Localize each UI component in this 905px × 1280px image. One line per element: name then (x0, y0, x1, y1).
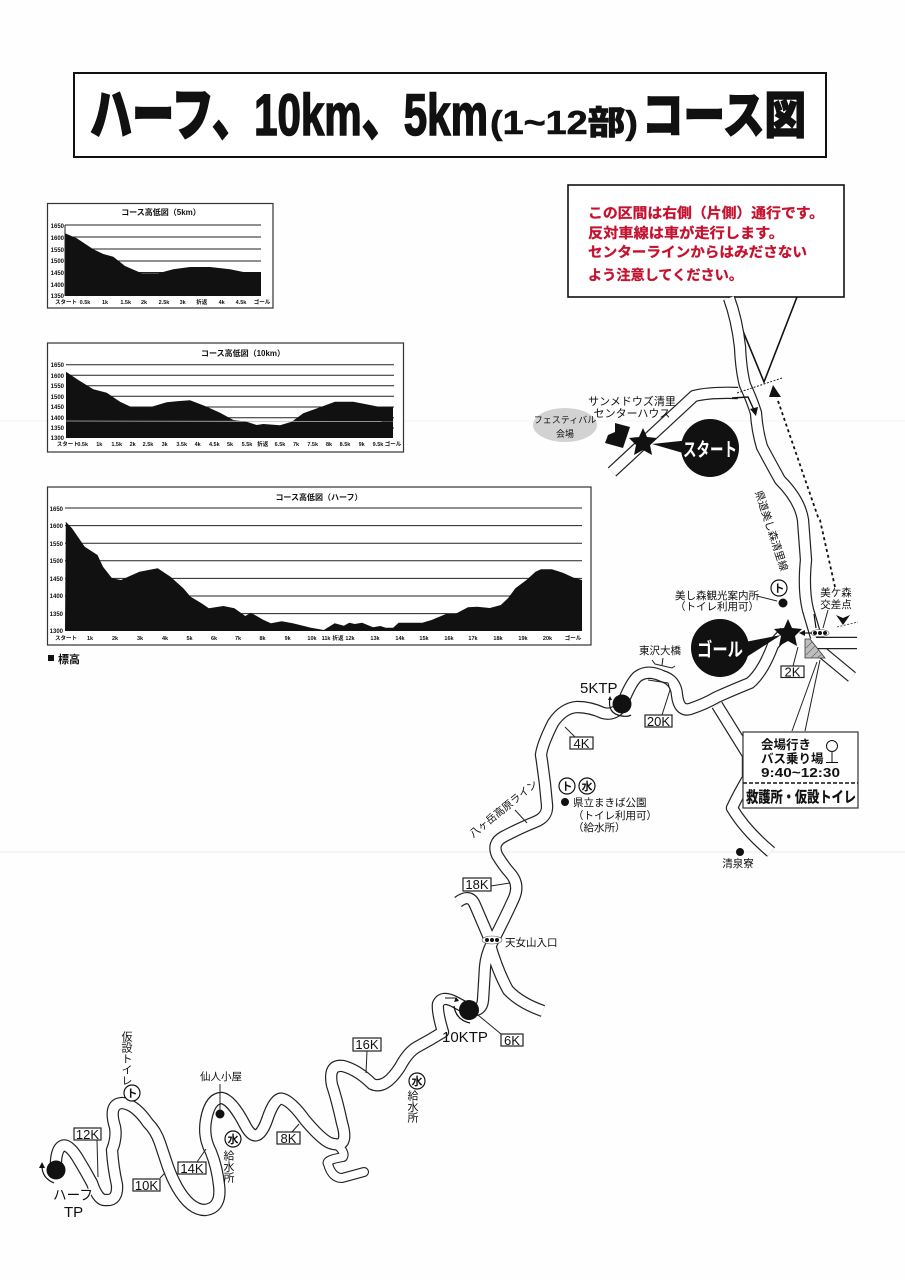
panel: elevation chart 5km: 1650 (51, 224, 65, 230)
panel: elevation chart 5km: 1400 (51, 283, 65, 289)
legend: elevation: 標高 (58, 652, 80, 666)
title: ハーフ、10km、5km (90, 83, 488, 148)
panel: elevation chart 10km: 3.5k (176, 442, 188, 448)
panel: elevation chart half: 12k (345, 636, 356, 642)
arrow: dashed one-way route (737, 378, 835, 587)
callout: one-side traffic notice: 反対車線は車が走行します。 (588, 225, 784, 241)
panel: elevation chart 10km: 5k (227, 442, 234, 448)
panel: elevation chart 5km: 1450 (51, 271, 65, 277)
label: Migamori crossing: 美ケ森 (820, 586, 852, 599)
label: festival venue: フェスティバル (534, 415, 596, 425)
panel: elevation chart 5km: 1550 (51, 248, 65, 254)
panel: elevation chart half: 1k (87, 636, 94, 642)
start marker: スタート (683, 439, 737, 461)
panel: elevation chart 10km: 7k (293, 442, 300, 448)
title: (1~12部) (490, 104, 638, 141)
callout: one-side traffic notice: この区間は右側（片側）通行です。 (588, 205, 824, 221)
10K turn point: 10KTP (442, 1029, 488, 1046)
5K turn point: 5KTP (580, 680, 618, 697)
panel: elevation chart 5km: 4.5k (236, 300, 247, 306)
panel: elevation chart 10km: 0.5k (77, 442, 89, 448)
label: 8K (277, 1124, 300, 1146)
panel: elevation chart 10km: コース高低図（10km） (201, 348, 285, 358)
panel: elevation chart half (48, 487, 591, 645)
panel: elevation chart half: 16k (444, 636, 455, 642)
panel: elevation chart 5km: コース高低図（5km） (121, 207, 201, 217)
label: 4K (565, 727, 593, 751)
label: festival venue: 会場 (556, 428, 574, 439)
panel: elevation chart 10km: 1450 (51, 405, 65, 411)
label: Higashisawa bridge (639, 644, 681, 668)
panel: bus stop and first aid: バス乗り場 (761, 751, 824, 766)
label: 2K: 2K (785, 664, 801, 680)
panel: elevation chart half: 1350 (50, 612, 64, 618)
panel: elevation chart 10km: 8.5k (340, 442, 351, 448)
panel: elevation chart half: 5k (186, 636, 193, 642)
panel: elevation chart half: ゴール (565, 634, 582, 642)
panel: elevation chart half: 1300 (50, 629, 64, 635)
panel: elevation chart half: 1600 (50, 524, 64, 530)
arrow: approach to Migamori crossing (836, 615, 850, 625)
panel: elevation chart 10km: 7.5k (307, 442, 319, 448)
panel: elevation chart 5km: 2.5k (159, 300, 170, 306)
callout: one-side traffic notice (568, 185, 844, 382)
panel: elevation chart 10km: 2.5k (143, 442, 154, 448)
panel: elevation chart 10km (48, 343, 404, 452)
panel: elevation chart 10km: 1350 (51, 426, 65, 432)
label: 14K (178, 1149, 206, 1176)
label: Seisenryo: 清泉寮 (722, 857, 754, 870)
panel: elevation chart 10km: 1500 (51, 395, 65, 401)
title: コース図 (642, 88, 806, 144)
label: 8K: 8K (281, 1131, 297, 1146)
label: Sun Meadows center house: センターハウス (594, 407, 670, 420)
5K turn point (580, 680, 632, 716)
label: tourist information: ト (774, 583, 784, 595)
label: Seisenryo (722, 848, 754, 870)
label: 10K: 10K (135, 1178, 158, 1193)
panel: elevation chart 5km: ゴール (254, 298, 271, 306)
title (74, 73, 826, 157)
course map roads (56, 298, 857, 1210)
panel: elevation chart 10km: 1600 (51, 374, 65, 380)
label: tourist information (675, 580, 788, 613)
label: tourist information: （トイレ利用可） (675, 601, 759, 613)
label: 18K (463, 877, 510, 892)
label: 18K: 18K (465, 877, 489, 892)
goal marker (691, 619, 802, 677)
water station 1: 給水所 (406, 1090, 418, 1124)
panel: elevation chart 5km: 折返 (196, 298, 208, 306)
callout: one-side traffic notice: センターラインからはみださない (588, 244, 807, 260)
panel: elevation chart half: 19k (518, 636, 529, 642)
label: Sun Meadows center house: サンメドウズ清里 (588, 394, 676, 408)
panel: elevation chart 10km: 9.5k (373, 442, 384, 448)
label: Migamori crossing: 交差点 (820, 598, 852, 611)
panel: elevation chart half: 1400 (50, 594, 64, 600)
label: 14K: 14K (180, 1161, 204, 1176)
panel: bus stop and first aid: 会場行き (761, 737, 811, 752)
label: Tennyosan entrance (482, 936, 558, 949)
water station 1: 水 (412, 1074, 422, 1088)
label: 10K (133, 1173, 165, 1193)
label: Sennin hut: 仙人小屋 (200, 1070, 242, 1083)
half turn point: TP (64, 1204, 83, 1221)
panel: elevation chart 5km: 3k (180, 300, 187, 306)
panel: elevation chart half: スタート (55, 634, 77, 642)
panel: elevation chart half: 20k (543, 636, 553, 642)
label: 20K (645, 680, 672, 729)
panel: elevation chart 10km: 6.5k (275, 442, 286, 448)
panel: elevation chart half: 1500 (50, 559, 64, 565)
panel: elevation chart 5km: 1350 (51, 294, 65, 300)
label: temporary toilet: ト (126, 1088, 138, 1100)
label: temporary toilet (120, 1031, 140, 1101)
panel: elevation chart 10km: 4k (195, 442, 202, 448)
icon: building (605, 423, 630, 448)
panel: elevation chart 5km: 1600 (51, 236, 65, 242)
label: 12K: 12K (76, 1127, 99, 1142)
panel: elevation chart 10km: 2k (130, 442, 137, 448)
panel: elevation chart half: 折返 (332, 634, 344, 642)
panel: elevation chart half: 10k (307, 636, 318, 642)
panel: elevation chart half: 18k (493, 636, 504, 642)
panel: elevation chart half: 6k (211, 636, 218, 642)
label: Sun Meadows center house (588, 394, 676, 420)
arrow: course direction at top turn (732, 397, 758, 416)
panel: elevation chart 10km: 4.5k (209, 442, 221, 448)
panel: elevation chart 10km: 1550 (51, 384, 65, 390)
start marker (629, 419, 739, 477)
label: Sennin hut (200, 1070, 242, 1118)
label: prefectural Makiba park: ト (562, 781, 572, 793)
label: 6K (478, 1015, 523, 1048)
panel: bus stop and first aid: 9:40~12:30 (761, 765, 840, 780)
panel: elevation chart half: 17k (468, 636, 479, 642)
hatched bus area (792, 639, 825, 731)
10K turn point (442, 997, 488, 1046)
label: prefectural Makiba park: （トイレ利用可） (573, 810, 657, 822)
panel: elevation chart 5km (48, 204, 273, 308)
panel: bus stop and first aid: 救護所・仮設トイレ (746, 788, 856, 806)
panel: elevation chart half: 9k (285, 636, 292, 642)
panel: elevation chart 10km: 1650 (51, 363, 65, 369)
label: 16K: 16K (355, 1037, 379, 1052)
panel: elevation chart 5km: 2k (141, 300, 148, 306)
label: 16K (353, 1037, 381, 1073)
panel: elevation chart 5km: 0.5k (80, 300, 91, 306)
panel: elevation chart 10km: スタート (57, 440, 79, 448)
panel: elevation chart 10km: 1k (96, 442, 103, 448)
half turn point (39, 1160, 93, 1221)
panel: elevation chart 10km: 1400 (51, 416, 65, 422)
label: prefectural road name: 県道美し森清里線 (752, 489, 791, 573)
label: 4K: 4K (574, 736, 590, 751)
panel: elevation chart half: 14k (395, 636, 406, 642)
panel: elevation chart half: 15k (419, 636, 430, 642)
panel: elevation chart half: 1550 (50, 542, 64, 548)
label: 6K: 6K (504, 1033, 520, 1048)
panel: elevation chart 5km: 1.5k (120, 300, 132, 306)
water station 2 (222, 1131, 241, 1184)
panel: elevation chart 10km: 8k (326, 442, 333, 448)
label: prefectural Makiba park: 水 (582, 779, 592, 793)
panel: elevation chart 10km: ゴール (385, 440, 402, 448)
panel: elevation chart half: 8k (259, 636, 266, 642)
panel: elevation chart 5km: 1500 (51, 259, 65, 265)
label: prefectural Makiba park: （給水所） (573, 821, 626, 834)
callout: one-side traffic notice: よう注意してください。 (588, 267, 743, 283)
panel: elevation chart half: コース高低図（ハーフ） (275, 492, 363, 502)
panel: bus stop and first aid (743, 732, 858, 808)
goal marker: ゴール (697, 638, 743, 661)
panel: elevation chart 5km: 4k (219, 300, 226, 306)
panel: elevation chart 10km: 3k (162, 442, 169, 448)
label: 20K: 20K (647, 714, 670, 729)
panel: elevation chart 10km: 1.5k (111, 442, 123, 448)
panel: elevation chart half: 3k (137, 636, 144, 642)
label: Yatsugatake Kogen Line: 八ヶ岳高原ライン (467, 777, 540, 840)
legend: elevation (48, 652, 80, 666)
panel: elevation chart half: 2k (112, 636, 119, 642)
panel: elevation chart half: 7k (235, 636, 242, 642)
label: Migamori crossing (799, 586, 858, 636)
label: festival venue (533, 408, 597, 442)
panel: elevation chart 10km: 1300 (51, 436, 65, 442)
water station 2: 給水所 (222, 1150, 234, 1184)
label: prefectural Makiba park: 県立まきば公園 (573, 796, 646, 809)
label: Higashisawa bridge: 東沢大橋 (639, 644, 681, 657)
panel: elevation chart half: 1650 (50, 507, 64, 513)
label: 2K (781, 647, 804, 680)
label: prefectural Makiba park (559, 778, 657, 834)
label: temporary toilet: 仮設トイレ (120, 1031, 132, 1086)
half turn point: ハーフ (53, 1187, 93, 1203)
water station 1 (406, 1073, 425, 1124)
panel: elevation chart 5km: スタート (55, 298, 77, 306)
panel: elevation chart 10km: 5.5k (242, 442, 253, 448)
panel: elevation chart half: 11k (322, 636, 331, 642)
panel: elevation chart 10km: 9k (359, 442, 366, 448)
panel: elevation chart half: 13k (370, 636, 381, 642)
label: 12K (74, 1127, 101, 1177)
panel: elevation chart 5km: 1k (102, 300, 109, 306)
water station 2: 水 (228, 1132, 238, 1146)
panel: elevation chart half: 1450 (50, 577, 64, 583)
panel: elevation chart 10km: 折返 (257, 440, 269, 448)
panel: elevation chart half: 4k (162, 636, 169, 642)
label: Tennyosan entrance: 天女山入口 (505, 936, 558, 949)
label: tourist information: 美し森観光案内所 (675, 589, 759, 602)
